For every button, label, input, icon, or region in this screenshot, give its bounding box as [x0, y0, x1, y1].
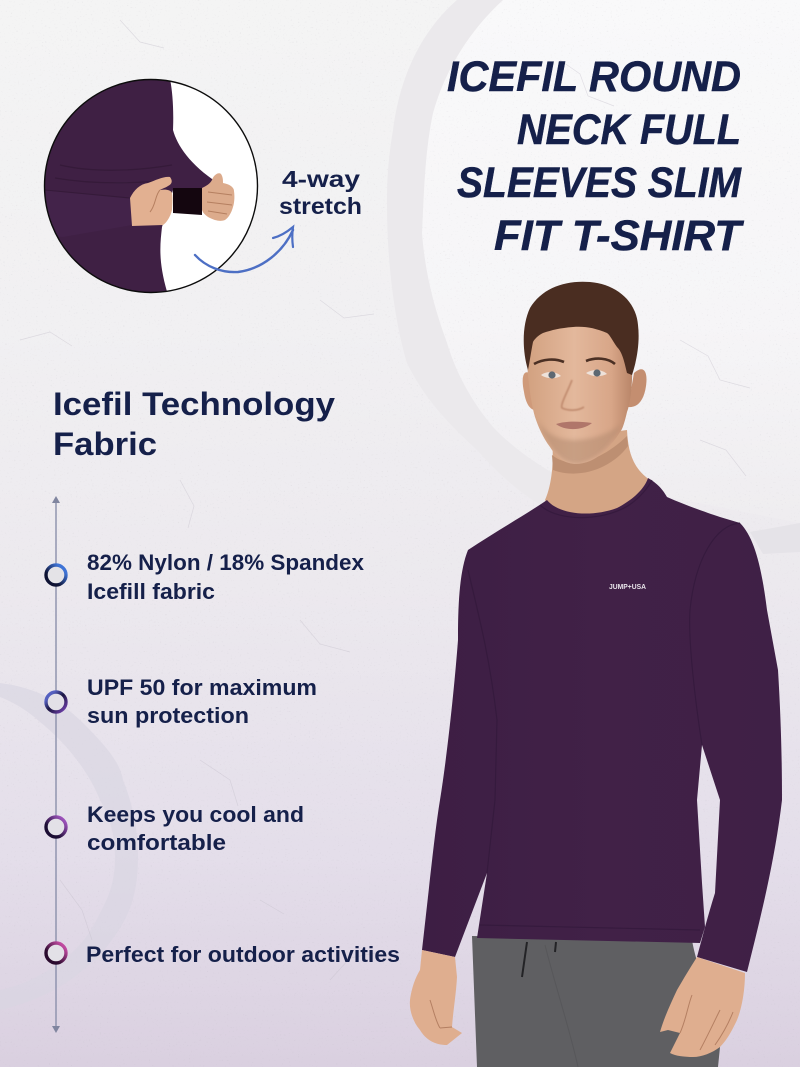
- bullet ring 1: [46, 565, 66, 585]
- bullet ring 3: [46, 817, 66, 837]
- model photo: [410, 282, 782, 1067]
- bullet text 1: [87, 550, 365, 604]
- bullet text 4: Perfect for outdoor activities: [86, 942, 400, 967]
- icon: right hand: [202, 173, 234, 221]
- heading: [53, 386, 335, 462]
- left hand: [410, 950, 462, 1045]
- shirt seams: [468, 480, 740, 930]
- bullet ring 4: [46, 943, 66, 963]
- bullet text 1: Icefill fabric: [87, 579, 215, 604]
- bullet text 1: 82% Nylon / 18% Spandex: [87, 550, 365, 575]
- bullet text 3: [87, 802, 304, 855]
- pants: [472, 936, 720, 1067]
- label: 4-way stretch: [279, 166, 362, 219]
- face: [527, 312, 632, 464]
- shirt: [422, 478, 782, 972]
- stubble shading: [540, 426, 619, 464]
- label: 4-way stretch: 4-way: [282, 166, 360, 192]
- bullet ring 2: [46, 692, 66, 712]
- shirt logo: JUMP+USA: [609, 584, 646, 591]
- icon: left hand: [130, 177, 172, 226]
- eyes and brows: [534, 359, 615, 364]
- heading: Fabric: [53, 426, 157, 462]
- title: [447, 53, 745, 260]
- hair: [524, 282, 639, 375]
- stretch photo circle: [30, 70, 258, 295]
- title: ICEFIL ROUND: [447, 53, 741, 101]
- bullet text 2: [87, 675, 317, 728]
- bullet text 2: sun protection: [87, 703, 249, 728]
- bullet text 3: Keeps you cool and: [87, 802, 304, 827]
- right hand: [660, 957, 745, 1057]
- title: NECK FULL: [517, 106, 741, 154]
- bullet text 2: UPF 50 for maximum: [87, 675, 317, 700]
- arrow: curved stretch arrow: [195, 227, 293, 272]
- label: 4-way stretch: stretch: [279, 193, 362, 219]
- title: SLEEVES SLIM: [457, 159, 742, 207]
- neck: [545, 430, 650, 525]
- timeline line with arrows: [52, 496, 60, 1033]
- nose and mouth: [562, 380, 584, 410]
- bullet text 3: comfortable: [87, 830, 226, 855]
- title: FIT T-SHIRT: [494, 212, 745, 260]
- heading: Icefil Technology: [53, 386, 335, 422]
- ears: [523, 372, 537, 410]
